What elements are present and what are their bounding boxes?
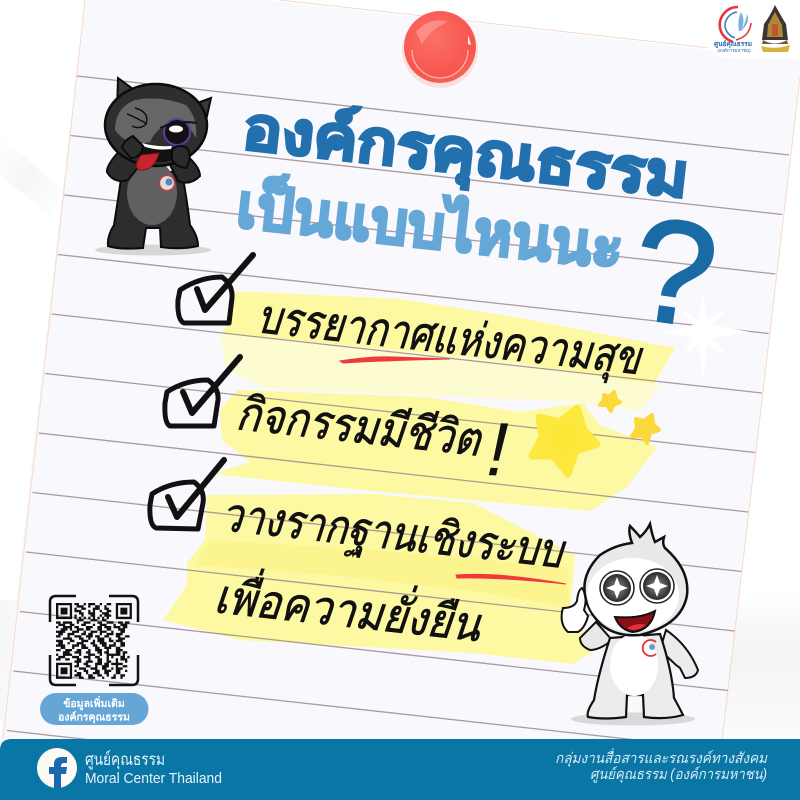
button: more information xyxy=(40,693,148,725)
QR frame xyxy=(50,596,138,685)
logo: moral center xyxy=(714,7,752,53)
icon: checkbox 2 xyxy=(165,357,240,426)
logo: temple emblem xyxy=(761,5,790,52)
large star xyxy=(532,408,597,474)
mascot left arm thumbs up xyxy=(580,622,612,650)
mascot chest badge xyxy=(643,640,656,656)
icon: checkbox 1 xyxy=(178,255,253,323)
item text 2: กิจกรรมมีชีวิต xyxy=(234,386,485,466)
cat chest badge xyxy=(160,176,174,190)
footer credit: กลุ่มงานสื่อสารและรณรงค์ทางสังคม xyxy=(555,748,768,767)
cat ears xyxy=(117,78,211,125)
logos tab xyxy=(707,5,800,59)
footer english name: Moral Center Thailand xyxy=(85,771,222,787)
cat body xyxy=(108,172,198,249)
icon: stars xyxy=(532,392,659,474)
small star right xyxy=(632,415,659,443)
footer credit: ศูนย์คุณธรรม (องค์การมหาชน) xyxy=(590,766,767,783)
mascot smile xyxy=(615,611,655,632)
cat winking eye xyxy=(127,108,147,128)
footer credit xyxy=(555,748,768,783)
checklist item 1 xyxy=(178,255,646,387)
question mark: ? xyxy=(623,186,726,358)
title line 1: องค์กรคุณธรรม xyxy=(239,94,692,214)
red underline 1 xyxy=(340,357,450,363)
exclamation mark: ! xyxy=(485,407,509,493)
background shadow streaks xyxy=(0,135,800,739)
mascot thumb hand xyxy=(562,588,588,632)
highlight: yellow brush strokes xyxy=(163,291,675,664)
QR code xyxy=(50,596,138,685)
footer band xyxy=(0,739,800,800)
mascot legs and body xyxy=(588,634,683,718)
cat mouth and tongue xyxy=(140,142,174,162)
checklist item 2 xyxy=(165,357,509,493)
cat paws xyxy=(122,136,190,168)
mascot head xyxy=(584,524,687,635)
mascot eyes xyxy=(600,569,674,605)
red underline 3 xyxy=(456,574,566,584)
icon: facebook xyxy=(37,748,77,788)
button: more information: องค์กรคุณธรรม xyxy=(58,710,130,724)
title line 2: เป็นแบบไหนนะ xyxy=(234,169,627,281)
logo: moral center: ศูนย์คุณธรรม xyxy=(714,40,752,49)
push pin xyxy=(402,11,478,88)
cat open eye xyxy=(164,119,190,145)
item text 4: เพื่อความยั่งยืน xyxy=(212,563,485,651)
sparkle xyxy=(660,290,750,380)
mascot: black cat xyxy=(95,78,211,256)
button: more information: ข้อมูลเพิ่มเติม xyxy=(63,695,125,711)
footer page name: ศูนย์คุณธรรม xyxy=(85,750,165,770)
mascot: white character xyxy=(562,524,698,726)
icon: checkbox 3 xyxy=(150,460,224,529)
logo: moral center: (องค์การมหาชน) xyxy=(717,47,751,53)
small star top xyxy=(600,392,620,411)
cat head xyxy=(105,84,207,166)
cat arms xyxy=(107,148,200,183)
item text 3: วางรากฐานเชิงระบบ xyxy=(219,487,568,581)
item text 1: บรรยากาศแห่งความสุข xyxy=(255,289,646,387)
QR modules xyxy=(56,603,132,679)
mascot right arm xyxy=(660,630,698,678)
title xyxy=(234,94,692,281)
checklist item 3 xyxy=(150,460,568,651)
